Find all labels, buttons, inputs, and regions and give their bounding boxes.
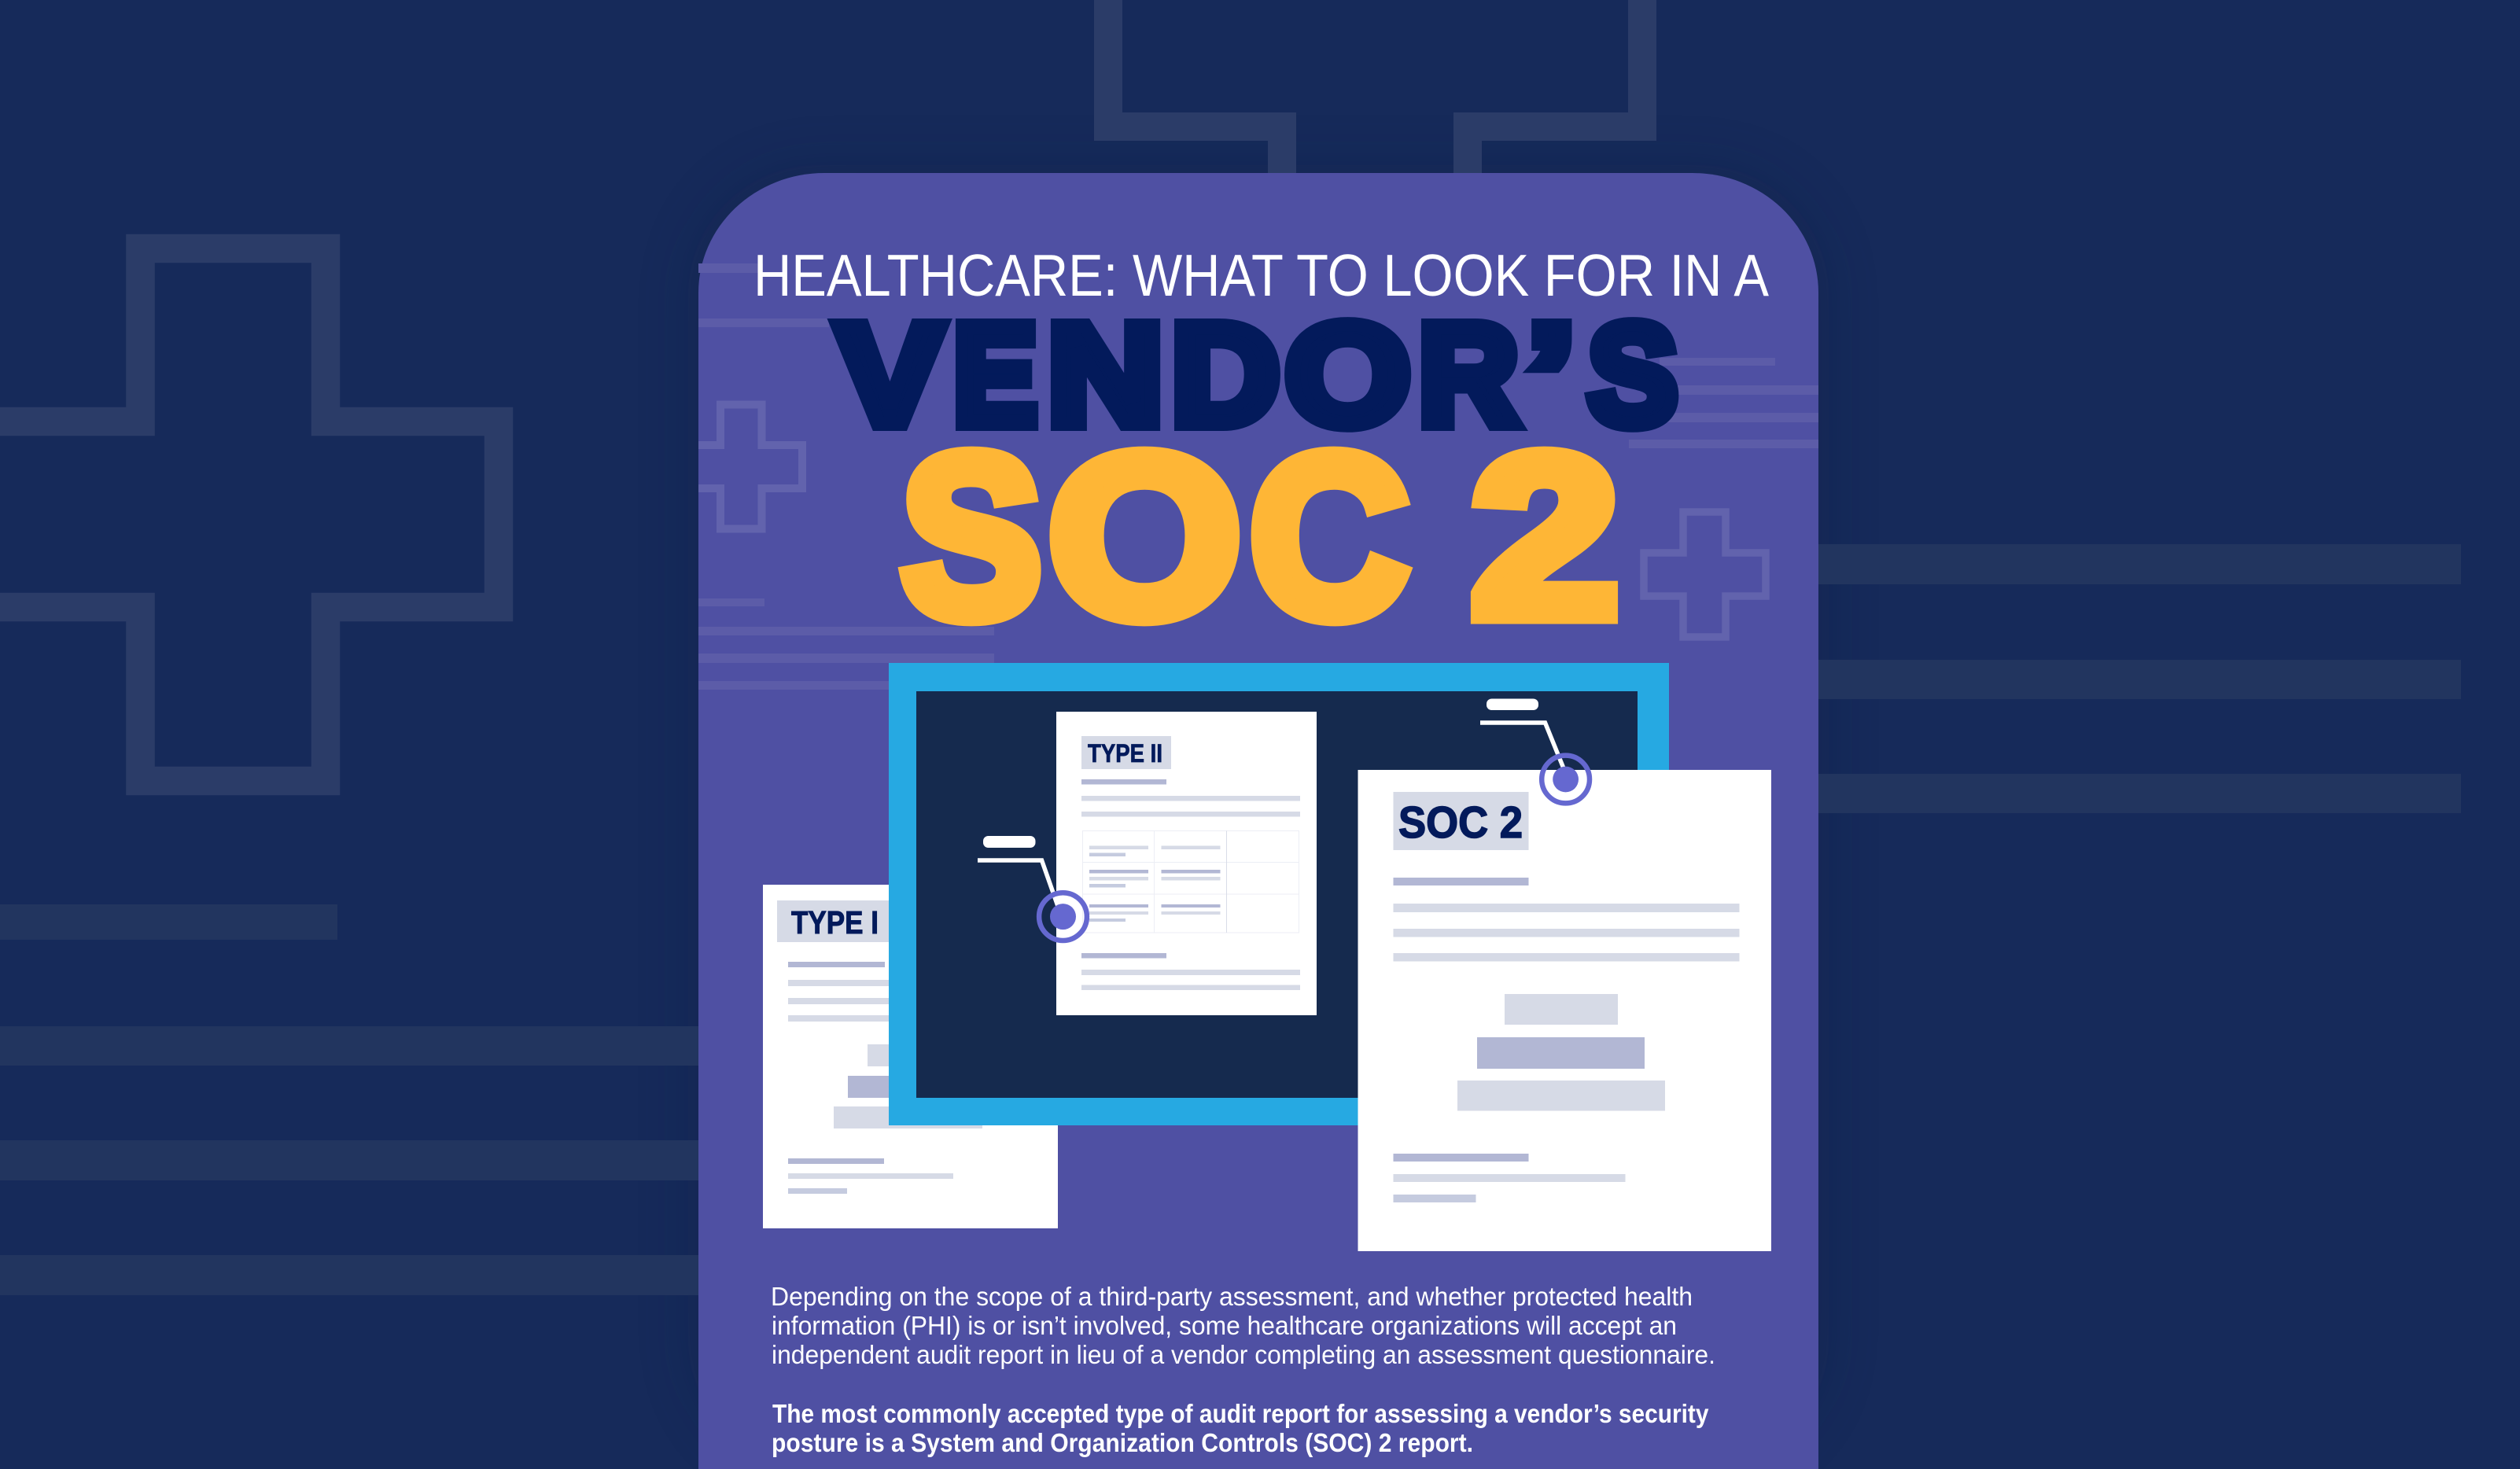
body text: key statement: posture is a System and Organization Controls (SOC) 2 report. (772, 1428, 1473, 1457)
document: TYPE I (763, 885, 1058, 1228)
title: SOC 2: O (1048, 407, 1241, 664)
callout: SOC 2 marker (1480, 698, 1590, 803)
title: SOC 2: 2 (1472, 407, 1619, 664)
body text: intro paragraph: Depending on the scope of a third-party assessment, and whether protected health (771, 1282, 1693, 1311)
body text: key statement (772, 1399, 1709, 1457)
monitor (889, 663, 1669, 1125)
tag: SOC 2: SOC 2 (1398, 797, 1523, 848)
body text: key statement: The most commonly accepted type of audit report for assessing a vendor’s security (772, 1399, 1709, 1428)
panel cross left (698, 404, 802, 528)
text lines (1394, 878, 1740, 961)
panel stripes (698, 263, 1818, 690)
background stripes right (1809, 544, 2461, 813)
title: VENDOR'S: D (1172, 295, 1279, 455)
title: VENDOR'S: N (1048, 295, 1163, 455)
title: VENDOR'S: ’ (1528, 295, 1575, 455)
background cross large left (0, 249, 499, 781)
footer lines (788, 1158, 953, 1194)
panel cross right (1644, 512, 1766, 637)
text lines (788, 962, 898, 1022)
title: VENDOR'S: V (837, 295, 942, 455)
title: VENDOR'S: S (1588, 295, 1678, 455)
title: VENDOR'S: O (1286, 295, 1410, 455)
background stripes left (0, 904, 708, 1295)
centre blocks (834, 1044, 982, 1128)
title: SOC 2: C (1251, 407, 1408, 664)
title: SOC 2: S (901, 407, 1041, 664)
document: SOC 2 (1358, 770, 1771, 1251)
title: VENDOR'S: E (953, 295, 1037, 455)
document: TYPE II (1056, 712, 1317, 1015)
title: subtitle line: HEALTHCARE: WHAT TO LOOK FOR IN A (753, 242, 1769, 308)
tag: TYPE II: TYPE II (1088, 739, 1162, 768)
text lines (1081, 779, 1300, 816)
footer lines (1394, 1154, 1625, 1202)
table (1082, 830, 1299, 933)
body text: intro paragraph: information (PHI) is or isn’t involved, some healthcare organizations will accept an (772, 1311, 1677, 1340)
background cross top (1108, 0, 1642, 181)
title: VENDOR'S: R (1419, 295, 1519, 455)
footer lines (1081, 953, 1300, 990)
panel: main purple card (698, 173, 1818, 1469)
body text: intro paragraph: independent audit report in lieu of a vendor completing an assessment questionnaire. (772, 1340, 1715, 1369)
centre blocks (1457, 994, 1665, 1110)
callout: Type II marker (978, 836, 1087, 941)
body text: intro paragraph (771, 1282, 1715, 1369)
tag: TYPE I: TYPE I (791, 904, 879, 941)
